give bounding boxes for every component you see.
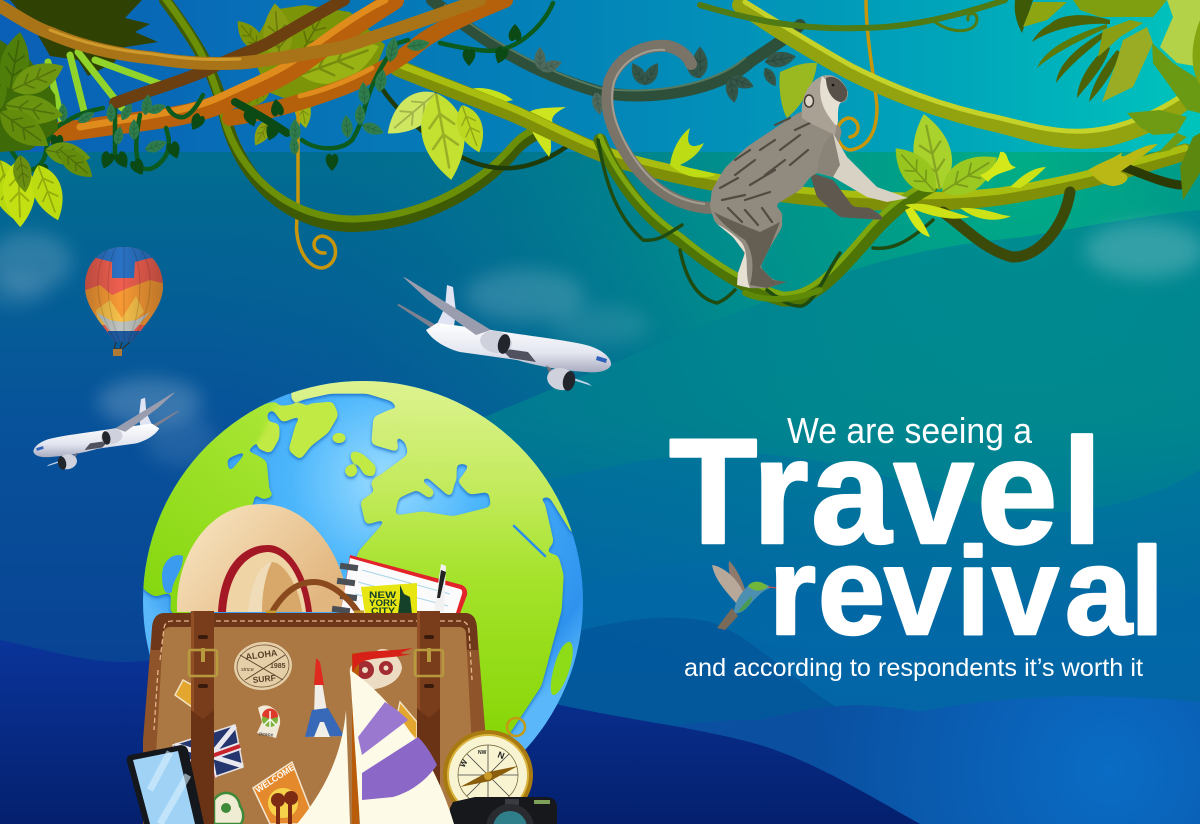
notebook bbox=[332, 555, 467, 617]
hat bbox=[177, 504, 350, 612]
sticker: green flower bbox=[214, 793, 243, 824]
New York City sticker bbox=[361, 583, 417, 617]
compass needle bbox=[460, 766, 518, 787]
strap left bbox=[191, 611, 214, 824]
buckle left bbox=[189, 648, 217, 676]
hot air balloon bbox=[80, 245, 170, 356]
compass: N bbox=[496, 749, 506, 761]
monkey body bbox=[710, 112, 842, 288]
hummingbird beak bbox=[768, 587, 778, 588]
compass loop bbox=[507, 718, 525, 736]
headline bbox=[669, 409, 1164, 682]
compass: W bbox=[458, 758, 470, 769]
hummingbird bbox=[712, 561, 778, 630]
monkey head bbox=[802, 75, 848, 135]
buckle right bbox=[415, 648, 443, 676]
airplane small bbox=[33, 392, 179, 471]
continent Americas bbox=[120, 403, 277, 612]
sticker: peace: peace bbox=[259, 731, 274, 738]
lime leaves near monkey hand bbox=[885, 110, 1158, 237]
compass bbox=[443, 718, 533, 820]
mountains bbox=[0, 210, 1200, 824]
dark thick loop right bbox=[943, 192, 1070, 257]
monkey fur strokes bbox=[720, 118, 812, 225]
sailboat jib sail bbox=[297, 710, 350, 824]
title: Travel: Travel bbox=[669, 409, 1102, 576]
green foreground leaves bbox=[1152, 43, 1200, 113]
suitcase handle bbox=[266, 582, 364, 612]
compass: NW bbox=[478, 750, 487, 756]
vines and foliage: back layer bbox=[0, 0, 1185, 306]
foliage top left bbox=[0, 30, 99, 228]
upper olive branch right bbox=[740, 5, 1185, 141]
stitching bbox=[160, 621, 472, 680]
notebook spiral rings bbox=[332, 563, 358, 614]
monkey bbox=[607, 46, 908, 288]
dark leaf at top edge bbox=[1015, 0, 1033, 33]
thin green vine top bbox=[700, 0, 1005, 28]
ivy with small leaves bbox=[4, 3, 553, 181]
continents Eurasia and Africa bbox=[288, 381, 572, 736]
olive top leaves bbox=[1023, 2, 1067, 27]
sailboat main sail bbox=[350, 670, 454, 824]
monkey leg shading bbox=[714, 212, 787, 288]
big leaf behind monkey bbox=[779, 63, 817, 118]
sticker: welcome bbox=[253, 762, 316, 824]
hummingbird body bbox=[734, 583, 770, 613]
sticker: peace bbox=[257, 705, 280, 738]
sticker: aloha surf: ALOHA bbox=[245, 648, 278, 662]
globe bbox=[143, 381, 583, 750]
camera bbox=[450, 797, 557, 824]
monkey far arm bbox=[810, 173, 887, 220]
olive branch long bbox=[398, 68, 1185, 203]
foliage top right bbox=[1015, 0, 1200, 200]
sticker: yellow sign right bbox=[396, 702, 417, 740]
New York City sticker: YORK bbox=[369, 598, 397, 609]
lime leaves on olive branch left of monkey bbox=[670, 128, 716, 178]
olive vine passing in front of monkey foot bbox=[745, 290, 820, 299]
sticker: aloha surf: since bbox=[241, 667, 254, 673]
sticker: union flag bbox=[172, 724, 244, 778]
New York City sticker: NEW bbox=[369, 590, 396, 601]
far foliage top left bbox=[10, 0, 160, 122]
monkey-side green vine bbox=[600, 140, 932, 300]
subline: and according to respondents it’s worth it bbox=[684, 654, 1143, 682]
teal-dark branch top bbox=[432, 0, 800, 116]
lake bbox=[162, 555, 183, 593]
hummingbird wing near bbox=[712, 565, 744, 603]
clouds bbox=[0, 222, 1200, 466]
sailboat mast bbox=[352, 653, 359, 824]
airplane large bbox=[397, 277, 611, 393]
title: revival: revival bbox=[769, 521, 1164, 660]
monkey tail bbox=[607, 46, 712, 208]
stickers bbox=[173, 639, 417, 824]
balloon basket bbox=[114, 342, 130, 349]
sailboat pennant bbox=[352, 648, 413, 672]
lime leaves centre bbox=[378, 81, 566, 184]
strap right bbox=[417, 611, 440, 824]
islands bbox=[258, 403, 375, 476]
orange branches bbox=[0, 0, 394, 138]
suitcase body bbox=[143, 613, 486, 824]
sticker: aloha surf: SURF bbox=[252, 673, 276, 685]
sticker: eiffel tower bbox=[305, 658, 344, 737]
tendrils bbox=[297, 110, 336, 268]
pen bbox=[434, 564, 446, 612]
suitcase bbox=[143, 582, 486, 824]
sticker: aloha surf bbox=[234, 642, 292, 690]
monkey ear bbox=[804, 95, 814, 107]
sticker: welcome: WELCOME bbox=[254, 762, 297, 795]
thin dark vine loops bbox=[598, 140, 682, 240]
olive big leaves bbox=[1098, 20, 1143, 57]
New York City sticker: CITY bbox=[371, 606, 396, 617]
dark fronds bbox=[1032, 15, 1110, 42]
continent Madagascar bbox=[551, 642, 573, 695]
monkey near arm bbox=[817, 133, 908, 202]
toy sailboat bbox=[297, 648, 454, 824]
sticker: flower bbox=[350, 649, 402, 690]
phone bbox=[127, 745, 204, 824]
hummingbird wing far bbox=[729, 561, 747, 600]
olive leaf cluster top centre bbox=[231, 0, 386, 149]
intro line: We are seeing a bbox=[787, 410, 1033, 451]
brown branch bbox=[115, 0, 344, 103]
hummingbird tail bbox=[717, 608, 738, 630]
sticker: aloha surf: 1985 bbox=[270, 663, 286, 670]
thin dark vine bbox=[383, 90, 566, 168]
olive vine left loop bbox=[165, 0, 555, 226]
sticker: yellow sign left bbox=[175, 680, 192, 707]
